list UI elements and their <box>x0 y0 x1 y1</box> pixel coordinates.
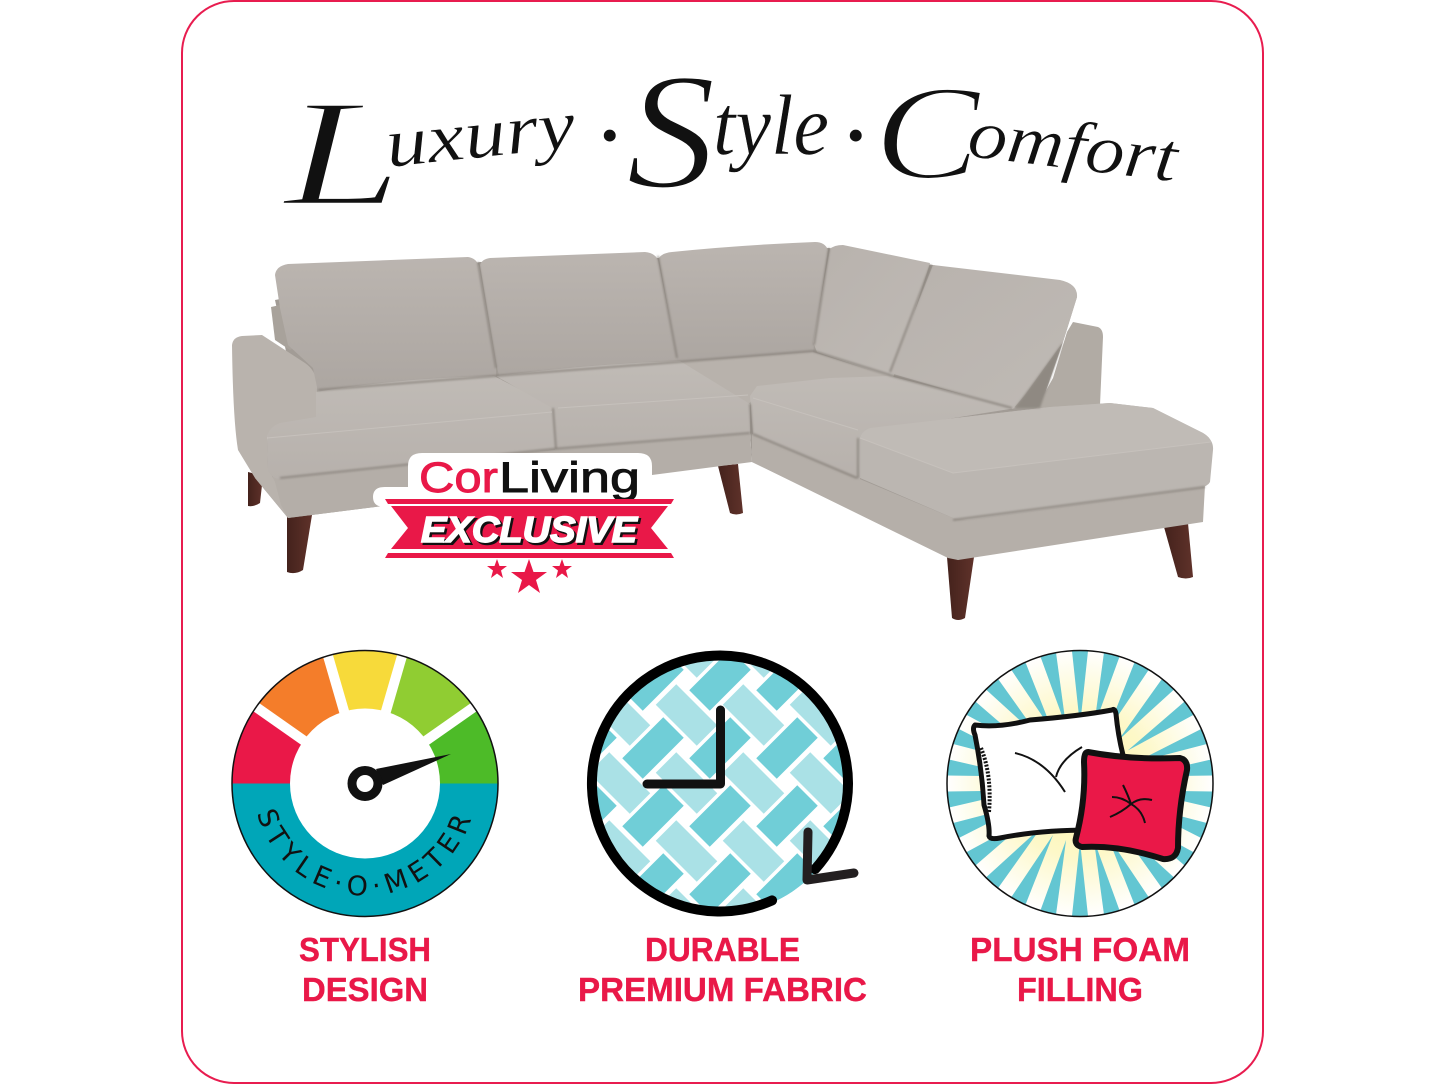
badge white backing <box>373 453 674 512</box>
title dot: • <box>601 107 619 163</box>
icon: durable fabric clock <box>587 650 854 917</box>
ribbon text shadow: EXCLUSIVE <box>423 511 640 552</box>
ribbon <box>385 499 674 558</box>
label: plush foam filling <box>970 931 1190 1008</box>
left arm <box>232 335 318 518</box>
back cushion 3 <box>659 242 828 364</box>
base right <box>752 434 1205 560</box>
sofa silhouette underlay <box>255 248 1200 560</box>
gauge yellow segment <box>328 651 402 784</box>
icon: style-o-meter gauge <box>231 650 499 918</box>
gauge needle <box>352 754 451 796</box>
title: Luxury Style Comfort <box>281 39 1184 237</box>
gauge green segment <box>365 707 498 784</box>
back cushion 1 <box>275 257 496 392</box>
label: plush foam filling: FILLING <box>1017 971 1143 1008</box>
white pillow <box>974 710 1123 839</box>
seat left <box>267 376 557 479</box>
sofa dark recess <box>1015 342 1063 408</box>
right arm <box>1036 322 1103 409</box>
label: stylish design: DESIGN <box>302 971 428 1008</box>
title capital L: L <box>281 69 402 237</box>
title capital C: C <box>874 59 982 208</box>
clock ring <box>592 655 848 911</box>
rounded page frame <box>182 1 1263 1083</box>
label: stylish design: STYLISH <box>299 931 431 968</box>
base left <box>272 433 752 518</box>
sunburst outline <box>947 650 1213 916</box>
sofa legs <box>248 464 1193 620</box>
clock arrowhead <box>807 832 854 880</box>
seat back corner <box>678 352 895 406</box>
label: stylish design <box>299 931 431 1008</box>
sectional sofa <box>232 242 1213 620</box>
brand name Living: Living <box>499 454 640 502</box>
sunburst disc <box>943 646 1217 920</box>
brand name Cor: Cor <box>419 454 498 502</box>
title word: omfort: omfort <box>964 95 1184 198</box>
curved label STYLE-O-METER: STYLE·O·METER <box>258 809 472 896</box>
seat middle <box>496 361 750 450</box>
back cushion 5 <box>890 265 1077 409</box>
title dot: • <box>847 107 865 163</box>
gauge dividers <box>256 656 474 784</box>
stars <box>487 559 572 593</box>
gauge orange segment <box>256 656 365 784</box>
chaise seat <box>857 403 1213 520</box>
label: durable premium fabric <box>578 931 867 1008</box>
label: durable premium fabric: PREMIUM FABRIC <box>578 971 867 1008</box>
back cushion 2 <box>480 252 678 380</box>
chaise top face <box>860 403 1211 473</box>
back cushion 4 <box>813 245 930 378</box>
label: plush foam filling: PLUSH FOAM <box>970 931 1190 968</box>
title word: uxury: uxury <box>382 86 580 183</box>
red cushion <box>1076 752 1187 859</box>
icon: plush foam pillows <box>943 646 1217 920</box>
sofa highlight stitching <box>267 395 1211 473</box>
gauge outline <box>232 650 498 916</box>
CorLiving exclusive badge <box>373 453 674 593</box>
seat right <box>750 376 1016 480</box>
sofa seams <box>280 248 1205 520</box>
gauge centre dial <box>290 708 440 858</box>
gauge lime segment <box>365 656 474 784</box>
rear frame behind cushions <box>271 305 300 350</box>
clock hands <box>647 710 720 784</box>
gauge red segment <box>232 707 365 784</box>
fabric weave disc <box>597 660 843 906</box>
gauge lower teal half <box>232 784 498 916</box>
title word: tyle: tyle <box>713 77 829 173</box>
label: durable premium fabric: DURABLE <box>645 931 800 968</box>
ribbon text EXCLUSIVE: EXCLUSIVE <box>421 509 638 550</box>
title capital S: S <box>626 39 716 223</box>
